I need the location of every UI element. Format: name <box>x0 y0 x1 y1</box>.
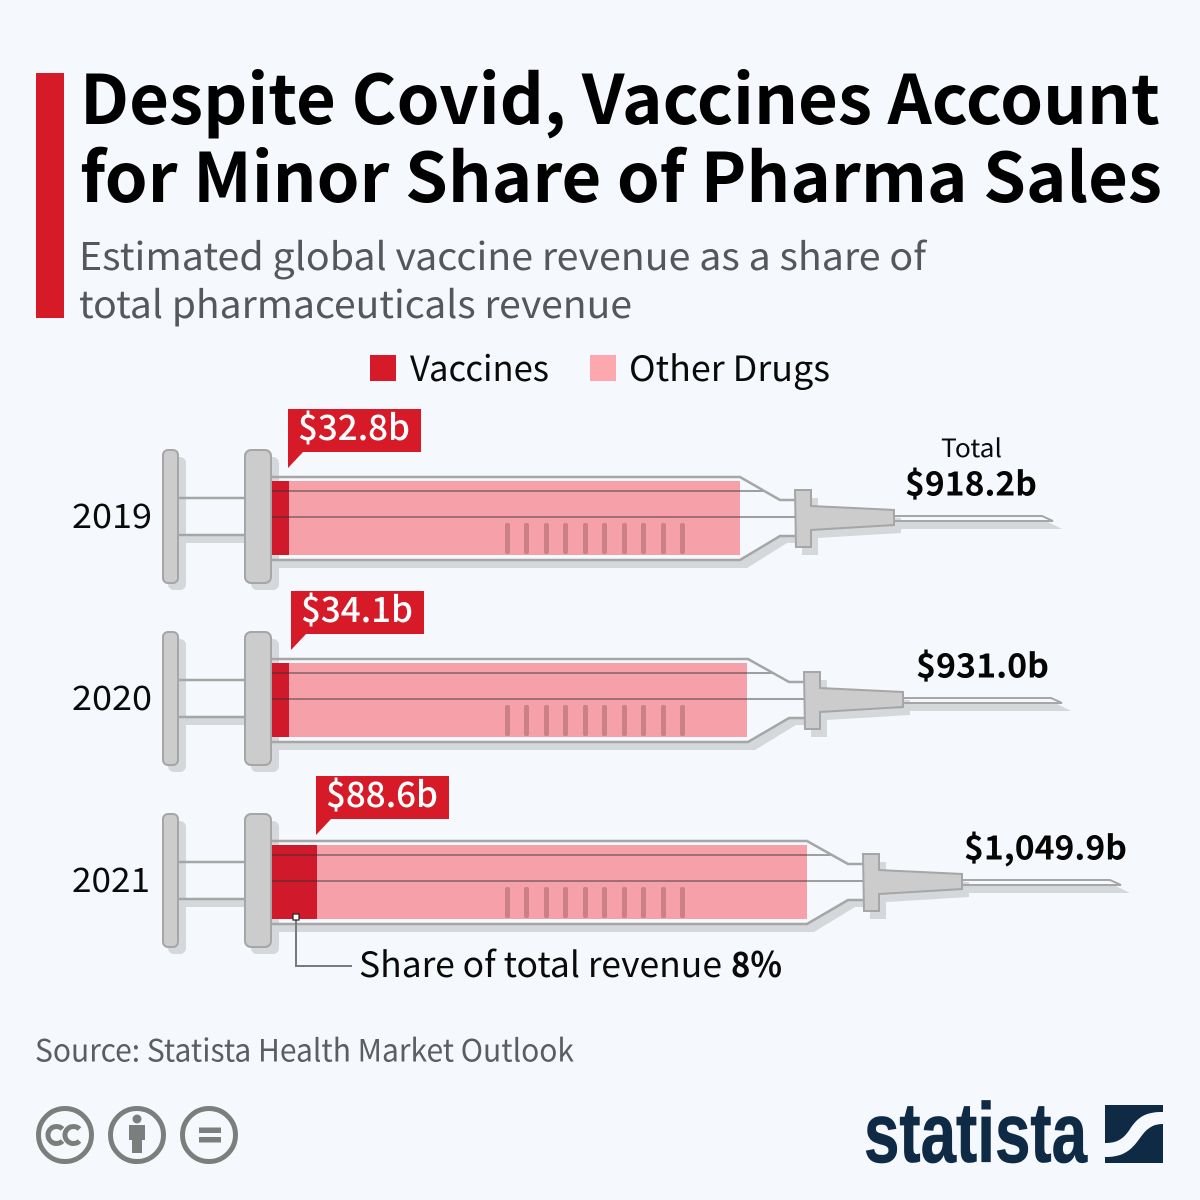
title: for Minor Share of Pharma Sales <box>80 123 1162 222</box>
callout $88.6b <box>316 767 449 835</box>
total label 2019: $918.2b <box>905 458 1037 506</box>
annotation: share of total revenue <box>293 914 782 988</box>
title accent bar <box>36 73 64 318</box>
total label 2020: $931.0b <box>916 640 1049 688</box>
title: Despite Covid, Vaccines Account <box>80 45 1160 144</box>
title <box>80 45 1162 222</box>
subtitle: total pharmaceuticals revenue <box>79 274 632 329</box>
icon: creative commons <box>38 1108 92 1162</box>
total label 2019 <box>905 429 1037 506</box>
year label 2021: 2021 <box>72 853 150 902</box>
annotation: share of total revenue: Share of total revenue <box>359 937 722 988</box>
syringe row: 2019 <box>72 400 1062 590</box>
callout $32.8b: $32.8b <box>298 400 410 451</box>
subtitle: Estimated global vaccine revenue as a share of <box>79 226 928 281</box>
year label 2020: 2020 <box>72 671 152 720</box>
syringe 2020 <box>163 632 1071 772</box>
syringe 2021 <box>163 814 1130 954</box>
legend <box>370 341 830 392</box>
year label 2019: 2019 <box>72 489 152 538</box>
icon: attribution <box>110 1108 164 1162</box>
syringe row: 2020 <box>72 582 1071 772</box>
callout $34.1b: $34.1b <box>301 582 413 633</box>
source: Source: Statista Health Market Outlook <box>35 1026 574 1070</box>
total label 2019: Total <box>941 429 1002 465</box>
icon: no derivatives <box>182 1108 236 1162</box>
callout $34.1b <box>291 582 424 650</box>
statista logo: statista <box>864 1086 1088 1180</box>
callout $32.8b <box>288 400 421 468</box>
annotation: share of total revenue: 8% <box>731 937 782 988</box>
total label 2021: $1,049.9b <box>964 822 1127 870</box>
syringe 2019 <box>163 450 1062 590</box>
syringe row: 2021 <box>72 767 1130 954</box>
legend: Vaccines <box>410 341 549 392</box>
subtitle <box>79 226 928 329</box>
callout $88.6b: $88.6b <box>326 767 438 818</box>
legend: Other Drugs <box>629 341 830 392</box>
